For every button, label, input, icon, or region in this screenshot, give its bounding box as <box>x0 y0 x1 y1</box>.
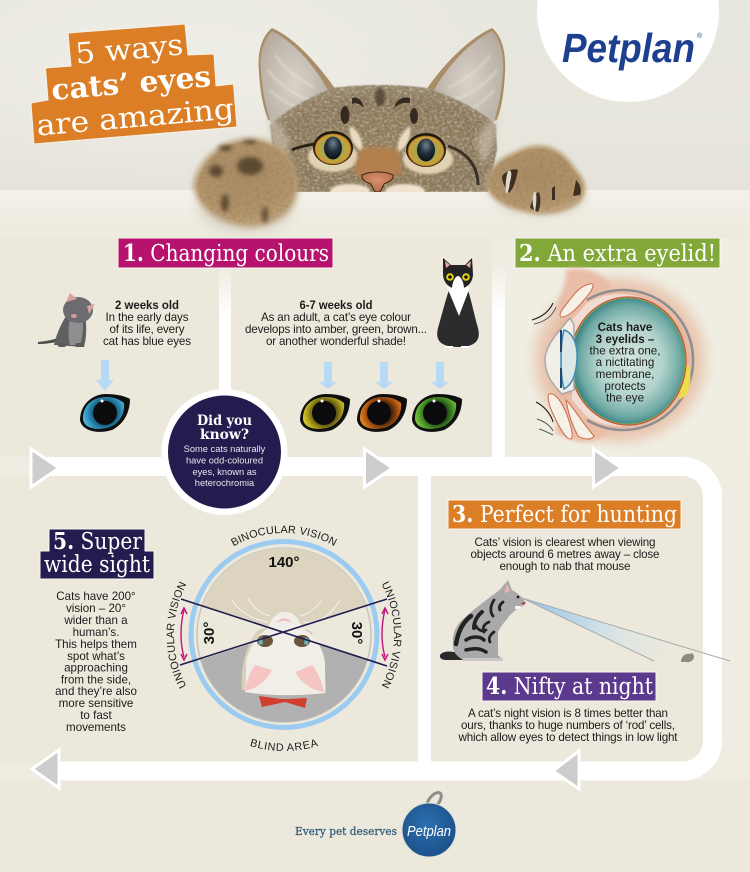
callout: did you know: have odd-coloured <box>186 456 263 466</box>
nose bridge <box>354 147 402 184</box>
cat head <box>268 85 497 198</box>
text: 2 weeks old: cat has blue eyes <box>103 335 191 348</box>
label: binocular vision: BINOCULAR VISION <box>230 526 337 546</box>
text: cats have 3 eyelids: a nictitating <box>596 356 654 369</box>
panel 3: heading: 3. Perfect for hunting <box>452 501 677 528</box>
icon: Petplan tag <box>402 790 456 857</box>
muzzle <box>328 182 372 192</box>
white connector path <box>40 262 712 771</box>
left paw <box>193 138 298 232</box>
text: 2 weeks old: 2 weeks old <box>115 299 179 312</box>
title banner: are amazing <box>35 91 235 143</box>
title banner <box>31 24 237 144</box>
panel 1: heading: 1. Changing colours <box>123 240 329 267</box>
title banner: cats’ eyes <box>50 59 212 107</box>
text: super wide sight <box>55 590 137 734</box>
label: right unilateral vision: UNIOCULAR VISION <box>382 581 402 688</box>
brow patches <box>350 126 362 152</box>
title banner: 5 ways <box>74 27 184 71</box>
callout: did you know: know? <box>200 427 249 443</box>
photo wall backdrop <box>0 0 750 238</box>
text: perfect for hunting: Cats’ vision is clearest when viewing <box>474 536 656 549</box>
forehead stripes <box>340 88 418 124</box>
footer tagline: Every pet deserves <box>295 824 397 838</box>
photo: cat peeking over ledge <box>193 28 585 232</box>
callout: did you know: Did you <box>197 413 252 429</box>
icon: tuxedo cat <box>437 258 479 348</box>
text: 6-7 weeks old: develops into amber, green, brown... <box>245 323 427 336</box>
panel 5: heading: 5. Super <box>53 528 142 555</box>
text: super wide sight: human’s. <box>73 626 119 639</box>
logo: Petplan: Petplan <box>562 25 695 71</box>
text: cats have 3 eyelids: protects <box>604 380 646 393</box>
text: super wide sight: vision – 20° <box>66 602 126 615</box>
text: perfect for hunting: objects around 6 metres away – close <box>470 548 660 561</box>
text: super wide sight: wider than a <box>63 614 128 627</box>
cheek patches <box>308 142 358 172</box>
text: super wide sight: to fast <box>80 709 113 722</box>
callout: did you know: eyes, known as <box>192 467 257 477</box>
sight lines <box>180 599 387 666</box>
label: left unilateral vision: UNIOCULAR VISION <box>166 582 186 689</box>
panel 5: heading: wide sight <box>44 552 151 578</box>
text: nifty at night: A cat’s night vision is 8 times better than <box>468 707 668 720</box>
text: super wide sight: from the side, <box>61 674 131 686</box>
icon: Petplan tag: Petplan <box>407 823 451 840</box>
right eye <box>406 133 446 167</box>
left eye <box>313 131 353 165</box>
icon: green eye <box>412 394 462 432</box>
text: 6-7 weeks old: As an adult, a cat’s eye colour <box>261 311 411 324</box>
text: cats have 3 eyelids: the eye <box>606 392 644 404</box>
text: super wide sight: movements <box>66 721 126 734</box>
arrow: down to amber eye <box>319 362 337 389</box>
magenta range arrows <box>181 608 388 660</box>
right paw <box>485 145 585 216</box>
eye stripes <box>448 146 478 185</box>
arrow: down to brown eye <box>375 362 393 389</box>
arrow marker 5 <box>32 750 59 788</box>
panel 2: heading: 2. An extra eyelid! <box>519 240 716 267</box>
icon: mouse <box>681 653 694 662</box>
text: 2 weeks old <box>103 299 191 348</box>
icon: vision beam <box>522 598 730 661</box>
icon: grey kitten <box>38 293 95 347</box>
text: cats have 3 eyelids: membrane, <box>596 368 654 381</box>
cat seen from above <box>232 598 340 708</box>
text: perfect for hunting: enough to nab that mouse <box>500 560 630 573</box>
text: 6-7 weeks old: 6-7 weeks old <box>300 299 372 312</box>
icon: tabby cat <box>440 580 526 661</box>
logo: Petplan <box>537 0 719 102</box>
icon: blue kitten eye <box>80 394 130 432</box>
logo: Petplan: ® <box>697 32 703 40</box>
nose <box>362 172 393 192</box>
cat ears <box>258 28 506 124</box>
text: super wide sight: spot what’s <box>67 650 125 663</box>
text: perfect for hunting <box>470 536 660 573</box>
arrow: down to green eye <box>431 362 449 389</box>
text: nifty at night: ours, thanks to huge numbers of ‘rod’ cells, <box>461 719 675 732</box>
text: super wide sight: Cats have 200° <box>56 590 136 603</box>
text: 2 weeks old: of its life, every <box>110 323 185 336</box>
label: 140 degrees: 140° <box>268 554 300 571</box>
text: cats have 3 eyelids: 3 eyelids – <box>596 333 655 346</box>
icon: brown eye <box>357 394 407 432</box>
diagram: field of vision <box>166 526 402 751</box>
icon: amber eye <box>300 394 350 432</box>
diagram: eye cross-section <box>520 264 720 456</box>
label: blind area: BLIND AREA <box>250 738 318 751</box>
text: super wide sight: This helps them <box>55 638 137 651</box>
text: super wide sight: more sensitive <box>59 697 133 710</box>
panel 5: heading <box>40 528 154 579</box>
panel 4: heading: 4. Nifty at night <box>486 673 654 700</box>
text: 6-7 weeks old: or another wonderful shade! <box>266 335 406 348</box>
label: right 30 degrees: 30° <box>348 622 365 644</box>
arrow marker 1 <box>31 449 59 487</box>
arrow marker 4 <box>553 751 579 789</box>
content panels <box>0 238 750 872</box>
text: nifty at night <box>458 707 678 744</box>
text: super wide sight: approaching <box>64 662 128 674</box>
text: super wide sight: and they’re also <box>55 685 137 698</box>
text: 6-7 weeks old <box>245 299 427 348</box>
callout: did you know: heterochromia <box>195 478 255 488</box>
text: cats have 3 eyelids: the extra one, <box>590 344 660 358</box>
arrow marker 3 <box>594 449 622 487</box>
text: cats have 3 eyelids <box>590 321 660 404</box>
arrow: down to blue eye <box>96 360 114 391</box>
curve paths for labels <box>174 525 394 745</box>
text: 2 weeks old: In the early days <box>106 311 189 324</box>
callout: did you know <box>162 389 288 515</box>
text: cats have 3 eyelids: Cats have <box>598 321 653 334</box>
label: left 30 degrees: 30° <box>201 622 218 644</box>
arrow marker 2 <box>364 449 392 487</box>
callout: did you know: Some cats naturally <box>184 444 266 454</box>
text: nifty at night: which allow eyes to detect things in low light <box>458 731 678 744</box>
